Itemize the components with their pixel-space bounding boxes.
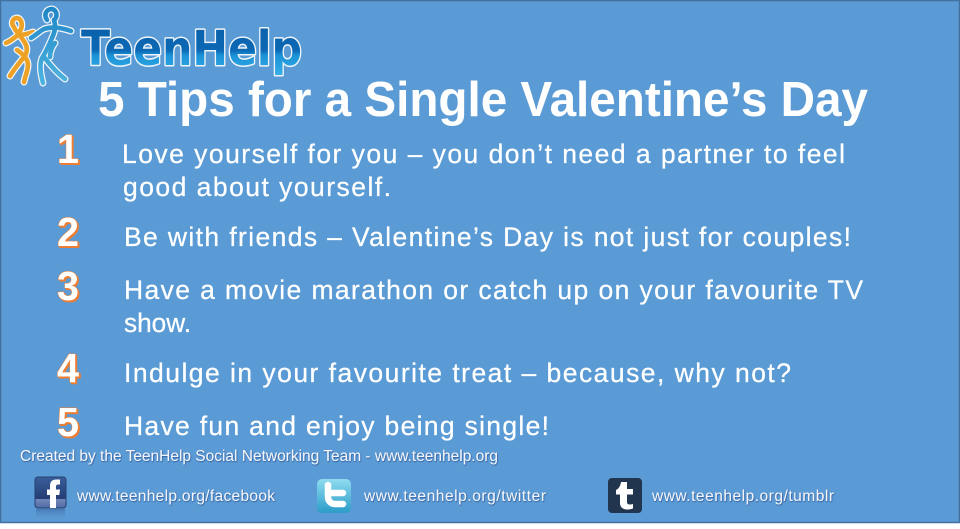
tip 1 text: good about yourself. xyxy=(123,172,391,202)
tip 4 text: Indulge in your favourite treat – because, why not? xyxy=(124,358,791,388)
title: 5 Tips for a Single Valentine’s Day xyxy=(98,73,868,127)
tip 5 xyxy=(57,399,549,445)
credit line: Created by the TeenHelp Social Networking Team - www.teenhelp.org xyxy=(20,448,498,465)
tip 5 text: Have fun and enjoy being single! xyxy=(124,411,549,441)
tip 3 xyxy=(57,263,863,338)
tip 3 text: Have a movie marathon or catch up on your favourite TV xyxy=(124,275,863,305)
number 5: 5 xyxy=(57,399,79,445)
icon: orange figure xyxy=(6,18,33,82)
number 4: 4 xyxy=(57,345,79,391)
icon: tumblr xyxy=(608,478,642,513)
twitter url: www.teenhelp.org/twitter xyxy=(363,488,546,505)
twitter link xyxy=(317,479,546,513)
icon: blue figure xyxy=(31,9,71,83)
number 3: 3 xyxy=(57,263,79,309)
tip 1 text xyxy=(122,139,845,202)
facebook url: www.teenhelp.org/facebook xyxy=(76,488,275,505)
icon: facebook xyxy=(35,477,66,521)
tip 2 xyxy=(57,209,851,255)
number 2: 2 xyxy=(57,209,79,255)
logo wordmark: TeenHelp xyxy=(81,21,302,77)
icon: twitter xyxy=(317,479,351,513)
logo: TeenHelp xyxy=(6,9,302,83)
facebook link xyxy=(35,477,275,521)
tip 1 xyxy=(57,126,845,202)
tip 3 text: show. xyxy=(124,308,191,338)
tumblr url: www.teenhelp.org/tumblr xyxy=(651,488,834,505)
tip 2 text: Be with friends – Valentine’s Day is not just for couples! xyxy=(124,222,851,252)
tumblr link xyxy=(608,478,834,513)
tip 4 xyxy=(57,345,791,391)
number 1: 1 xyxy=(57,126,79,172)
tip 1 text: Love yourself for you – you don’t need a partner to feel xyxy=(122,139,845,169)
tip 3 text xyxy=(124,275,863,338)
